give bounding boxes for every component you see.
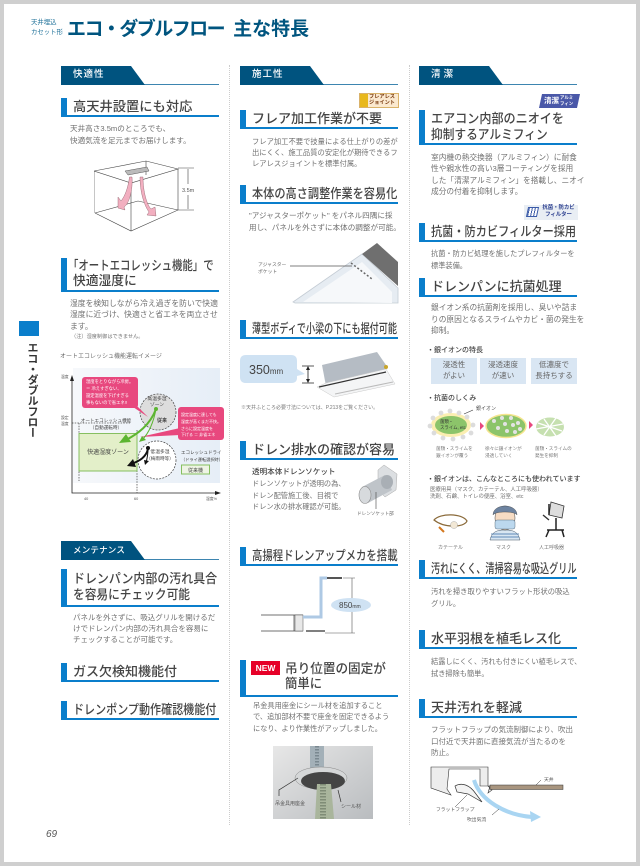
heading (61, 663, 219, 682)
heading: 薄型ボディで小梁の下にも据付可能 (252, 321, 397, 336)
feature box (531, 358, 577, 384)
heading: ガス欠検知機能付 (73, 664, 177, 679)
feature: aluminium fin (419, 94, 585, 196)
body text: 銀イオン系の抗菌剤を採用し、臭いや詰ま (431, 303, 577, 312)
title prefix: product type: 天井埋込 (31, 19, 57, 26)
title prefix: product type (31, 18, 63, 36)
illustration: flat flap airflow: フラットフラップ (436, 807, 475, 813)
heading: エアコン内部のニオイを (431, 111, 564, 126)
chart: operation image: 設定 (61, 415, 69, 420)
diagram: antibacterial mechanism: 銀イオン (476, 405, 496, 412)
badge: flareless joint: フレアレス (369, 94, 395, 100)
body text: になり、より作業性がアップしました。 (253, 724, 382, 733)
illustration: flat flap airflow (428, 764, 568, 824)
chart: operation image: 従来機 (188, 467, 203, 474)
diagram: antibacterial mechanism: 浸透していく (485, 452, 512, 459)
illustration: 850mm lift (261, 576, 371, 634)
badge: clean aluminium fin: フィン (560, 101, 573, 106)
illustration: catheter mask ventilator: 人工呼吸器 (539, 544, 564, 551)
body text (70, 124, 191, 144)
section tab: comfort: 快適性 (73, 69, 105, 80)
body text: 吊金具用座金にシール材を追加すること (253, 701, 382, 710)
body text: "アジャスターポケット" をパネル四隅に採 (249, 211, 393, 220)
diagram: antibacterial mechanism: 菌類・スライムの (535, 445, 572, 452)
body text: りの原因となるスライムやカビ・菌の発生を (431, 314, 584, 324)
section tab: installation (240, 66, 398, 85)
heading (61, 569, 219, 607)
feature box: 浸透速度 (488, 360, 518, 369)
badge: antibacterial filter: フィルター (545, 212, 572, 218)
body text: 拭き掃除も簡単。 (431, 668, 489, 678)
chart: operation image: 湿度をとりながら冷房。 (86, 378, 133, 385)
feature: drain pan antibacterial (419, 278, 584, 335)
badge: clean aluminium fin (539, 94, 580, 108)
heading: 高揚程ドレンアップメカを搭載 (252, 548, 398, 563)
body text: 成分の付着を抑制します。 (431, 187, 522, 196)
feature box: 低濃度で (539, 360, 569, 369)
body text: チェックすることが可能です。 (73, 635, 177, 644)
body text: 天井高さ3.5mのところでも、 (70, 124, 170, 133)
section tab: maintenance (61, 541, 219, 560)
feature box: 浸透性 (443, 360, 465, 369)
illustration: 350mm unit: 350mm (249, 363, 284, 377)
heading: 水平羽根を植毛レス化 (431, 631, 561, 646)
body text: 快適気流を足元までお届けします。 (70, 136, 191, 144)
body text: 口付近で天井面に直接気流が当たるのを (431, 737, 566, 746)
chart: operation image: （梅雨時等） (146, 455, 174, 462)
body text (431, 153, 585, 196)
illustration: flat flap airflow: 吹出気流 (467, 816, 486, 823)
body text: uses: 洗剤、石鹸、トイレの便座、浴室、etc (430, 494, 523, 500)
heading: 本体の高さ調整作業を容易化 (252, 186, 397, 201)
chart: operation image: 湿度% (206, 496, 218, 501)
feature box: がよい (443, 370, 465, 380)
heading: フレア加工作業が不要 (252, 111, 382, 126)
body text: 標準装備。 (431, 261, 467, 270)
chart: operation image: 40 (84, 497, 88, 501)
subheading: silver ion uses: ・銀イオンは、こんなところにも使われています (427, 476, 580, 483)
heading: 抗菌・防カビフィルター採用 (431, 224, 576, 239)
badge: new (251, 661, 280, 675)
heading (419, 630, 577, 649)
body text (252, 137, 398, 168)
body text: 湿度を検知しながら冷え過ぎを防いで快適 (70, 299, 218, 308)
panel: column 2 installation (240, 66, 401, 819)
title prefix: product type: カセット形 (31, 29, 63, 36)
heading: 天井汚れを軽減 (431, 700, 522, 715)
note: ※天井ふところ必要寸法については、P.213をご覧ください。 (241, 405, 378, 411)
heading: を容易にチェック可能 (73, 587, 190, 602)
illustration: catheter mask ventilator: カテーテル (438, 545, 463, 551)
badge: clean aluminium fin: アルミ (560, 95, 573, 100)
chart: operation image: （ドライ運転選択時） (181, 456, 223, 463)
side tab: eco double flow (19, 321, 39, 437)
body text: した「清潔アルミフィン」を搭載し、ニオイ (431, 176, 585, 185)
feature box: が速い (492, 370, 514, 380)
body text: ます。 (70, 322, 93, 331)
heading (419, 699, 577, 718)
badge: flareless joint (359, 93, 399, 108)
heading (240, 110, 398, 129)
body text: 汚れを掃き取りやすいフラット形状の吸込 (431, 587, 570, 596)
feature box (480, 358, 526, 384)
body text: uses (430, 486, 543, 500)
feature: easy clean grille (419, 560, 577, 608)
panel: column 1 comfort and maintenance (60, 66, 224, 720)
heading: 抑制するアルミフィン (431, 127, 548, 142)
body text: で、追加部材不要で座金を固定できるよう (253, 712, 389, 721)
feature: ceiling dirt reduction (419, 699, 577, 824)
illustration: room airflow: 3.5m (182, 188, 194, 194)
chart: operation image: 設定温度に達しても (181, 411, 217, 417)
heading: 高天井設置にも対応 (73, 99, 192, 114)
body text: 用し、パネルを外さずに本体の調整が可能。 (249, 223, 401, 232)
feature: drain pan check (61, 569, 219, 644)
badge: antibacterial filter (524, 205, 578, 220)
feature: drain check (240, 441, 398, 517)
heading (419, 278, 577, 297)
chart: operation image: 湿度が高くまだ不快。 (181, 418, 221, 424)
diagram: antibacterial mechanism (428, 405, 572, 459)
chart: operation image: 事もないので省エネ!! (86, 399, 127, 406)
photo: bolt and washer (273, 746, 373, 819)
illustration: 350mm unit (240, 352, 396, 398)
feature: hanging position fix (240, 660, 398, 819)
body text: 性や親水性の高い3層コーティングを採用 (431, 164, 573, 173)
body text: 結露しにくく、汚れも付きにくい植毛レスで、 (431, 657, 581, 666)
heading: 「オートエコレッシュ機能」で (68, 258, 214, 273)
chart title: オートエコレッシュ機能運転イメージ (60, 354, 162, 360)
feature: antibacterial filter (419, 204, 578, 270)
chart: operation image: 高温多湿 (147, 395, 167, 402)
section tab: comfort (61, 66, 219, 85)
heading: ドレンパン内部の汚れ具合 (73, 571, 217, 586)
chart: operation image: オートエコレッシュ機能 (81, 417, 132, 424)
heading: ドレン排水の確認が容易 (252, 442, 395, 457)
body text (252, 479, 345, 511)
diagram: antibacterial mechanism: 菌類・スライムを (436, 445, 473, 452)
illustration: adjuster pocket: ポケット (258, 268, 277, 275)
diagram: antibacterial mechanism: 徐々に銀イオンが (485, 445, 522, 452)
panel: column 3 cleanliness (419, 66, 585, 823)
chart: operation image: ＝ 冷えすぎない、 (86, 385, 122, 392)
badge: new: NEW (256, 663, 275, 673)
chart: operation image: エコレッシュドライ (181, 450, 222, 456)
section tab: installation: 施工性 (252, 69, 284, 80)
title (31, 18, 309, 40)
body text: uses: 医療用具（マスク、カテーテル、人工呼吸器） (430, 487, 543, 493)
heading: ドレンポンプ動作確認機能付 (73, 702, 216, 717)
body text (431, 656, 581, 679)
chart: operation image: さらに設定温度を (181, 425, 213, 431)
heading (61, 98, 219, 117)
feature: height adjustment (240, 185, 401, 304)
chart: operation image: 従来 (157, 417, 167, 424)
heading (240, 660, 398, 697)
subheading: antibacterial mechanism: ・抗菌のしくみ (427, 395, 476, 402)
chart: operation image: 温度 (61, 421, 69, 426)
feature: auto eco refresh (60, 258, 224, 501)
body text: パネルを外さずに、吸込グリルを開けるだ (73, 613, 215, 622)
feature: thin body (240, 320, 398, 411)
heading: 吊り位置の固定が (285, 661, 386, 676)
feature: horizontal vane (419, 630, 577, 680)
body text (431, 724, 573, 759)
body text: 室内機の熱交換器（アルミフィン）に耐食 (431, 153, 577, 162)
body text: ドレン配管施工後、目視で (252, 491, 338, 500)
body text (431, 587, 570, 608)
illustration: catheter mask ventilator (433, 502, 565, 551)
body text: フレア加工不要で技量による仕上がりの差が (252, 137, 398, 146)
feature: drain up mechanism (240, 547, 398, 634)
illustration: flat flap airflow: 天井 (544, 776, 554, 783)
chart: operation image: （自動運転時） (90, 424, 122, 431)
side tab blue square (19, 321, 39, 336)
illustration: catheter mask ventilator: マスク (496, 545, 511, 551)
main title text: エコ・ダブルフロー 主な特長 (67, 19, 309, 40)
diagram: antibacterial mechanism: 発生を抑制 (535, 452, 558, 459)
body text: 抑制。 (431, 326, 454, 335)
heading: 快適湿度に (73, 273, 137, 288)
diagram: antibacterial mechanism: スライム, etc (440, 425, 467, 431)
diagram: antibacterial mechanism: 銀イオンが覆う (436, 452, 468, 459)
heading: ドレンパンに抗菌処理 (431, 279, 562, 294)
badge: flareless joint: ジョイント (369, 100, 395, 106)
body text (70, 299, 218, 331)
illustration: drain socket (357, 464, 398, 517)
badge: antibacterial filter: 抗菌・防カビ (542, 205, 575, 211)
body text: ドレン水の排水確認が可能。 (252, 502, 345, 511)
section tab: cleanliness (419, 66, 577, 85)
heading: 簡単に (285, 676, 322, 691)
chart: operation image: 設定温度を下げすぎる (86, 392, 129, 399)
feature box (431, 358, 477, 384)
chart: operation image: 温度 (61, 374, 69, 379)
illustration: adjuster pocket (258, 243, 398, 304)
feature: flareless (240, 93, 399, 168)
body text: 湿度に近づけ、快適さと省エネを両立させ (70, 310, 218, 319)
note: （注）湿度制御はできません。 (71, 334, 143, 340)
feature box: 長持ちする (535, 370, 573, 380)
chart: operation image: 下げる ＝ 非省エネ (181, 431, 215, 437)
panel: silver ion details (427, 346, 580, 551)
chart: operation image (61, 368, 224, 501)
body text: 防止。 (431, 748, 454, 757)
chart: operation image: 60 (134, 497, 138, 501)
feature: high ceiling (61, 98, 219, 232)
heading: 汚れにくく、清掃容易な吸込グリル (431, 561, 576, 576)
chart: operation image: 快適湿度ゾーン (87, 448, 129, 456)
body text (431, 303, 584, 335)
page number: 69 (46, 829, 57, 840)
body text: 出にくく、施工品質の安定化が期待できるフ (252, 148, 398, 157)
subheading: silver ion features: ・銀イオンの特長 (427, 347, 483, 354)
photo: bolt and washer: 吊金具用座金 (275, 800, 305, 807)
side tab vertical text: エコ・ダブルフロー (26, 342, 38, 437)
heading (61, 258, 219, 292)
body text (73, 613, 215, 644)
illustration: room airflow (94, 160, 194, 232)
body text: レアレスジョイントを標準付属。 (252, 159, 361, 168)
section tab: maintenance: メンテナンス (73, 545, 125, 555)
illustration: adjuster pocket: アジャスター (258, 261, 287, 268)
chart: operation image: 低温多湿 (150, 448, 170, 455)
badge: clean aluminium fin: 清潔 (544, 96, 559, 105)
section tab: cleanliness: 清潔 (431, 69, 456, 80)
photo: bolt and washer: シール材 (341, 803, 361, 810)
subheading: 透明本体ドレンソケット (252, 467, 336, 476)
heading (419, 110, 577, 145)
body text (249, 211, 401, 232)
body text: 抗菌・防カビ処理を施したプレフィルターを (431, 249, 575, 258)
illustration: 850mm lift: 850mm (339, 601, 361, 610)
body text (253, 701, 389, 733)
body text: フラットフラップの気流制御により、吹出 (431, 725, 573, 734)
body text: ドレンソケットが透明の為、 (252, 479, 345, 488)
body text: グリル。 (431, 598, 460, 608)
chart: operation image: ゾーン (150, 402, 164, 408)
body text: けでドレンパン内部の汚れ具合を容易に (73, 624, 208, 633)
body text (431, 249, 575, 270)
diagram: antibacterial mechanism: 菌類・ (440, 418, 453, 425)
illustration: drain socket: ドレンソケット部 (357, 510, 394, 517)
